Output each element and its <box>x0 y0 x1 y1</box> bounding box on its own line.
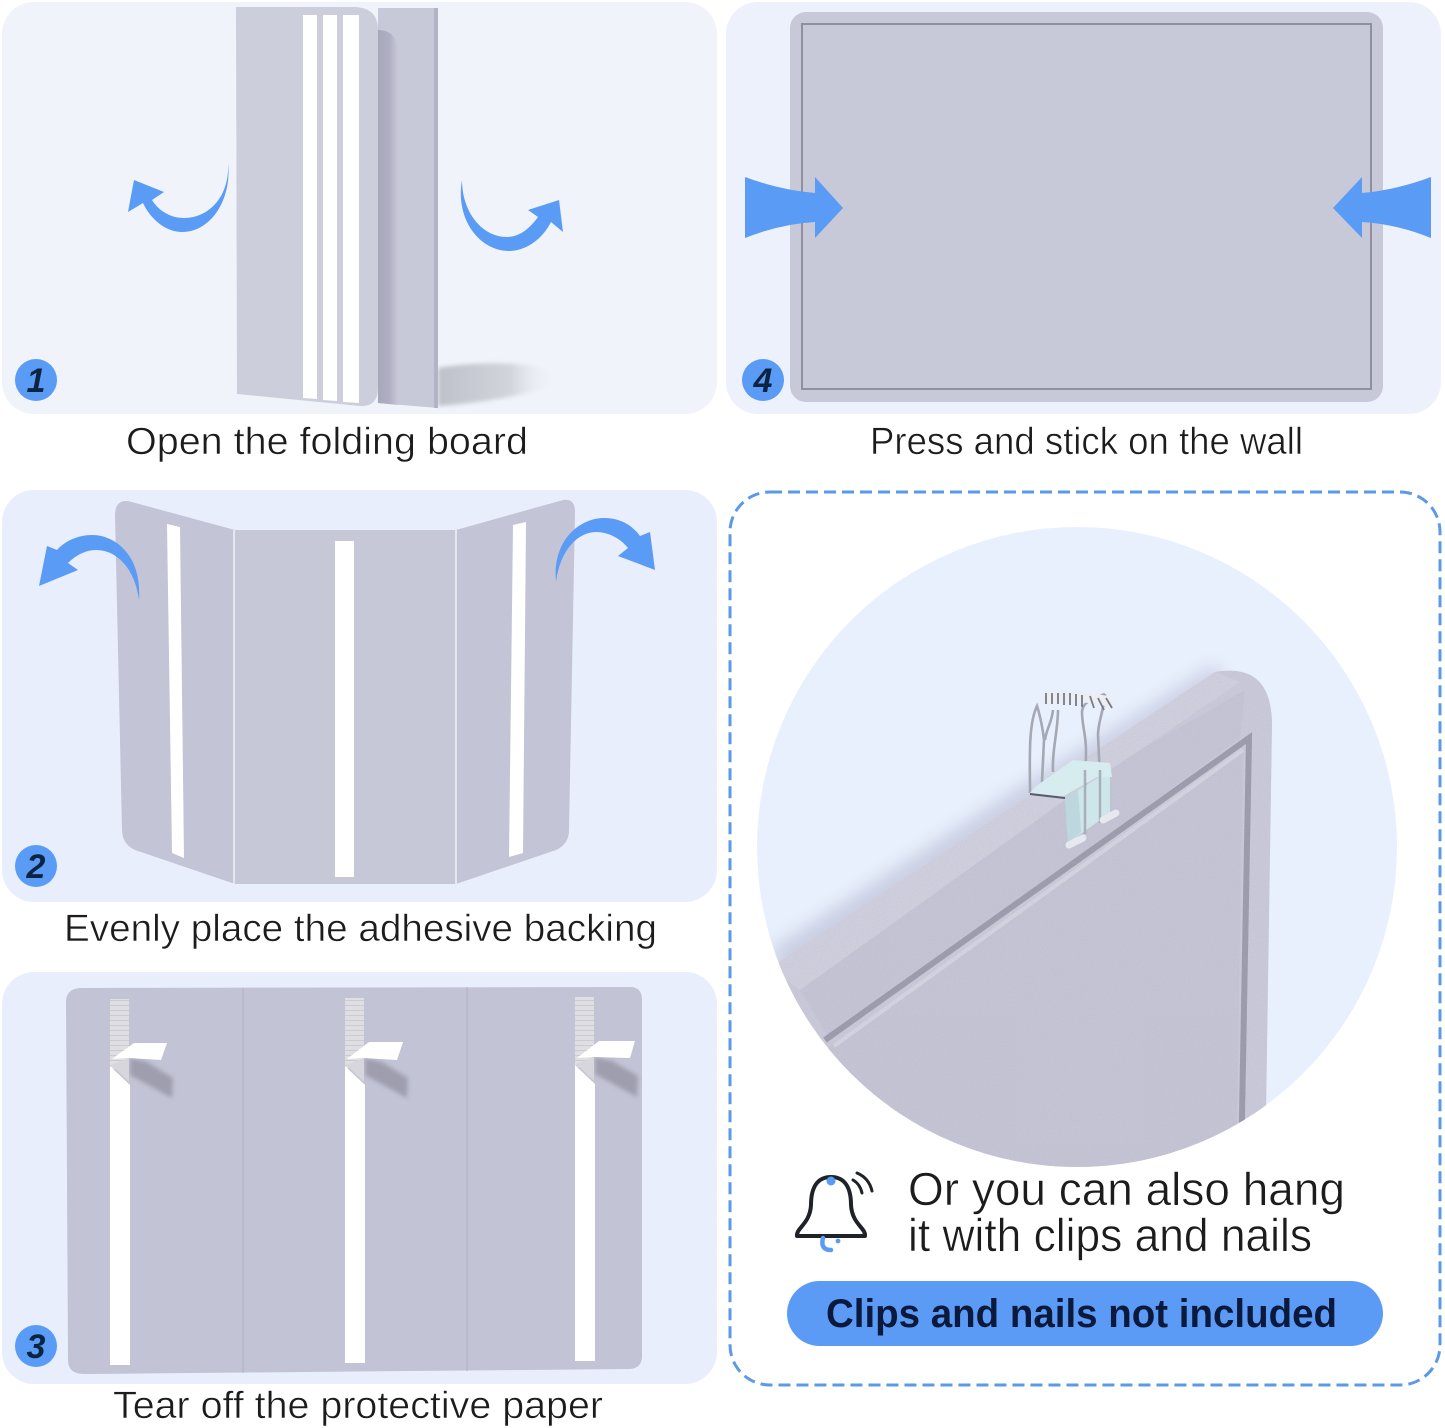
adhesive strips <box>303 15 359 403</box>
clip wire handles <box>1030 694 1105 834</box>
caption: step 4: Press and stick on the wall <box>870 421 1303 463</box>
icon: notification bell <box>797 1173 872 1250</box>
adhesive strips <box>167 522 526 877</box>
arrow: right fold out <box>461 180 563 251</box>
arrow: right wing <box>556 518 655 582</box>
arrow: left wing <box>39 535 139 600</box>
callout: clips not included: Clips and nails not included <box>826 1292 1337 1336</box>
step badge 4: 4 <box>753 362 773 400</box>
panel: step 3 tear protective paper <box>2 972 717 1384</box>
peeling strip left <box>110 999 173 1365</box>
groove <box>825 738 1249 1170</box>
magnified circle view <box>757 527 1397 1180</box>
note text: it with clips and nails <box>908 1209 1312 1261</box>
fold lines <box>234 530 456 884</box>
arrow: press from left <box>745 177 843 238</box>
step badge 3 <box>15 1325 57 1367</box>
binder clip <box>1030 693 1116 845</box>
board inner panel <box>802 24 1371 389</box>
right wing of board <box>456 500 575 884</box>
panel: step 1 open the folding board <box>2 2 717 414</box>
board outer frame <box>770 671 1272 1180</box>
floor shadow <box>438 363 557 406</box>
note text: Or you can also hang <box>908 1163 1345 1215</box>
front frame band <box>800 690 1245 1040</box>
light top surface <box>770 672 1240 990</box>
clip mint jaw <box>1065 766 1110 843</box>
step badge 1: 1 <box>27 362 45 400</box>
inner panel <box>828 1048 1237 1167</box>
panel: step 4 press and stick <box>726 2 1441 414</box>
arrow: left fold out <box>128 163 229 232</box>
clip spring <box>1043 697 1113 703</box>
step badge 1 <box>15 359 57 401</box>
board frame <box>790 12 1383 402</box>
callout: clips not included <box>787 1281 1383 1346</box>
step badge 3: 3 <box>27 1328 46 1366</box>
clip hinge tubes <box>1069 838 1083 845</box>
left wing of board <box>115 501 235 884</box>
front board leaf <box>236 7 378 406</box>
board edge line under clip <box>1030 794 1065 798</box>
fold lines <box>243 987 467 1373</box>
caption: step 1: Open the folding board <box>126 421 528 463</box>
wall shadow above board <box>770 664 1225 985</box>
centre of board <box>235 530 456 884</box>
surface grain <box>852 769 1219 1031</box>
dashed outline <box>730 492 1440 1385</box>
fold shadow on back leaf <box>378 30 398 405</box>
step badge 2: 2 <box>26 848 46 886</box>
panel: step 2 adhesive backing <box>2 490 717 902</box>
step badge 4 <box>742 359 784 401</box>
caption: step 3: Tear off the protective paper <box>113 1385 603 1427</box>
step badge 2 <box>15 845 57 887</box>
peeling strip right <box>575 997 638 1361</box>
arrow: press from right <box>1333 177 1431 238</box>
panel: alternative hanging method <box>730 492 1440 1385</box>
back board leaf <box>378 8 438 408</box>
note text <box>908 1163 1345 1261</box>
unfolded board <box>66 987 642 1374</box>
caption: step 2: Evenly place the adhesive backing <box>64 908 657 950</box>
peeling strip centre <box>345 998 408 1363</box>
